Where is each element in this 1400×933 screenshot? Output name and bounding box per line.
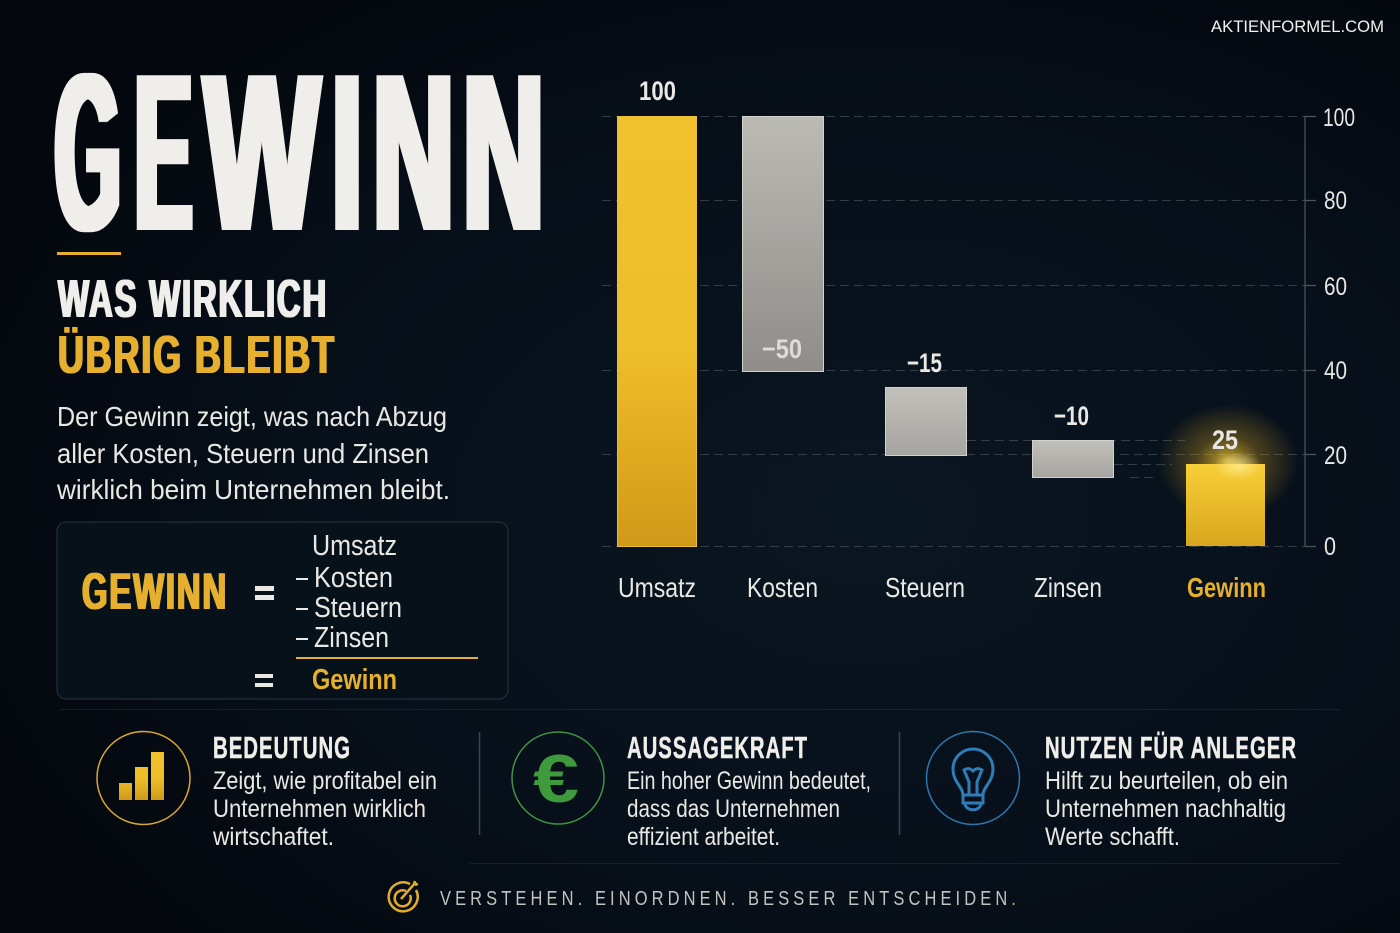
block: Bedeutung: wirtschaftet.: [212, 823, 334, 851]
value labels: −15: [907, 348, 942, 378]
formula lines: Zinsen: [314, 622, 389, 654]
title underline: [57, 252, 121, 255]
block: Nutzen für Anleger: Unternehmen nachhaltig: [1045, 795, 1286, 823]
value labels: −10: [1054, 401, 1089, 431]
bar: Zinsen: [1032, 440, 1114, 478]
glow behind Gewinn bar: [1158, 404, 1298, 520]
website label: AKTIENFORMEL.COM: [1211, 17, 1384, 36]
y axis labels: 100: [1323, 104, 1355, 132]
y axis labels: 0: [1324, 533, 1336, 561]
title: I: [332, 26, 362, 278]
icon: euro: [512, 732, 604, 824]
subtitle line one: WAS WIRKLICH: [58, 269, 328, 329]
block: Aussagekraft: Ein hoher Gewinn bedeutet,: [627, 767, 871, 795]
block: Bedeutung: Zeigt, wie profitabel ein: [213, 767, 437, 795]
formula lines: Kosten: [314, 562, 393, 594]
intro text: [56, 401, 450, 505]
y axis: [1305, 116, 1316, 546]
title: E: [135, 26, 192, 278]
block: Bedeutung: Unternehmen wirklich: [213, 795, 426, 823]
icon: euro: €: [533, 741, 579, 817]
equals sign: [255, 586, 274, 600]
sum line: [296, 657, 478, 659]
category labels: Gewinn: [1187, 572, 1266, 603]
block: Nutzen für Anleger: Hilft zu beurteilen, ob ein: [1045, 767, 1288, 795]
tagline: VERSTEHEN. EINORDNEN. BESSER ENTSCHEIDEN.: [440, 888, 1020, 910]
value labels: 25: [1212, 425, 1238, 455]
title: G: [55, 26, 120, 278]
title: W: [204, 26, 320, 278]
subtitle line two: ÜBRIG BLEIBT: [58, 325, 336, 385]
category labels: Umsatz: [618, 572, 696, 603]
block: Bedeutung: BEDEUTUNG: [213, 730, 351, 765]
intro text: aller Kosten, Steuern und Zinsen: [57, 438, 429, 469]
panel: formula: [57, 522, 508, 699]
block: Aussagekraft: dass das Unternehmen: [627, 795, 840, 823]
highlight on Gewinn bar: [1214, 452, 1262, 480]
value labels: −50: [762, 334, 802, 364]
icon: light bulb: [926, 732, 1020, 824]
formula lines: Umsatz: [312, 530, 397, 562]
waterfall chart: [602, 76, 1355, 603]
icon: bar chart: [97, 732, 190, 824]
intro text: Der Gewinn zeigt, was nach Abzug: [57, 401, 447, 432]
block: Bedeutung: [212, 730, 437, 851]
formula result: Gewinn: [312, 664, 397, 696]
category labels: Zinsen: [1034, 572, 1102, 603]
category labels: Kosten: [747, 572, 818, 603]
bar: Kosten: [742, 116, 824, 372]
block: Aussagekraft: AUSSAGEKRAFT: [627, 730, 808, 765]
intro text: wirklich beim Unternehmen bleibt.: [56, 474, 450, 505]
category labels: [618, 572, 1266, 603]
block: Nutzen für Anleger: [1045, 730, 1297, 851]
y axis labels: 60: [1324, 273, 1347, 301]
icon: target: [389, 881, 418, 911]
block: Aussagekraft: effizient arbeitet.: [627, 823, 780, 851]
y axis labels: 80: [1324, 187, 1347, 215]
bar: Umsatz: [618, 116, 696, 546]
y axis labels: 20: [1324, 442, 1347, 470]
formula heading: GEWINN: [82, 563, 228, 621]
value labels: 100: [639, 76, 676, 106]
category labels: Steuern: [885, 572, 965, 603]
result equals sign: [255, 674, 273, 687]
bar: Gewinn: [1186, 464, 1265, 546]
value labels: [639, 76, 1238, 455]
info strip: [60, 710, 1340, 864]
title: N: [373, 26, 454, 278]
bar: Steuern: [886, 388, 966, 456]
text: N: [463, 26, 544, 278]
block: Aussagekraft: [627, 730, 871, 851]
formula lines: [296, 530, 402, 654]
y axis labels: [1323, 104, 1355, 561]
y axis labels: 40: [1324, 357, 1347, 385]
formula lines: Steuern: [314, 592, 402, 624]
block: Nutzen für Anleger: Werte schafft.: [1045, 823, 1180, 851]
